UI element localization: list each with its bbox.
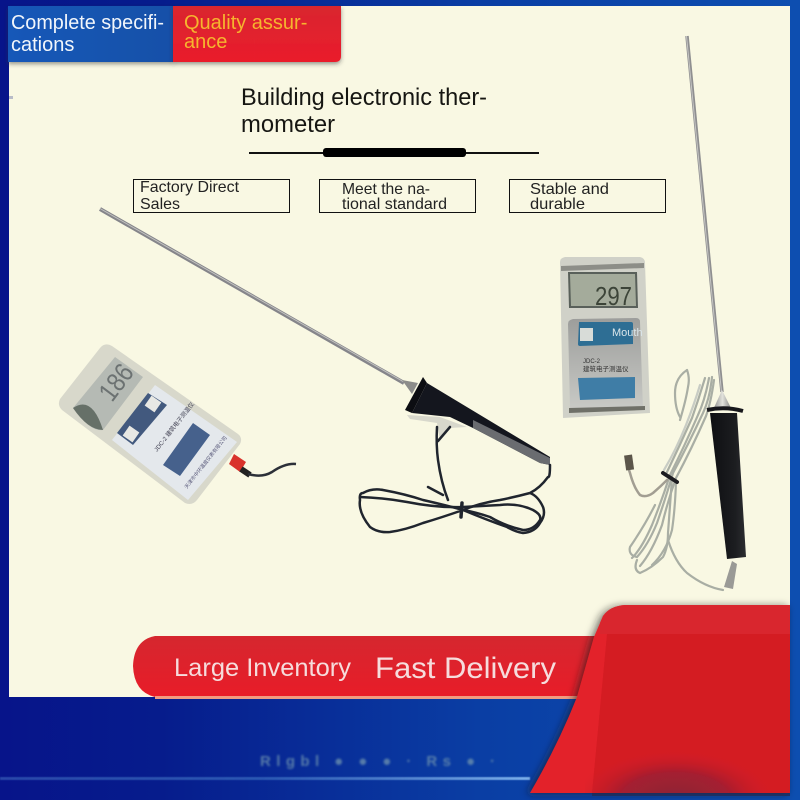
thermocouple tip: [624, 455, 634, 470]
meter spec panel: [163, 423, 210, 476]
badge: quality assurance: Quality assur-: [184, 12, 307, 34]
title: Building electronic ther-: [241, 84, 487, 111]
photo: vertical probe with silver cable: [624, 36, 746, 590]
silver cable bundle: [628, 370, 723, 590]
upright meter model: JDC-2: [583, 359, 601, 365]
meter screen: [73, 357, 143, 430]
meter connector and lead: [229, 454, 246, 472]
badge: complete specifications: Complete specifi-: [11, 12, 164, 34]
meter reading: 186: [93, 358, 140, 407]
badge: quality assurance: [173, 6, 341, 62]
title: [241, 84, 487, 138]
label box: national standard: Meet the na-: [342, 181, 430, 198]
photo: angled digital meter: 天津市中环温度仪表有限公司: [183, 435, 229, 490]
label box: national standard: [320, 180, 476, 213]
probe cable loops: [360, 427, 550, 533]
label box: factory direct sales: [134, 179, 290, 213]
label box: stable and durable: durable: [530, 196, 585, 213]
watermark text: Mouth: [612, 327, 643, 339]
title: mometer: [241, 111, 335, 138]
upright meter reading: 297: [595, 281, 632, 311]
title divider: [249, 148, 539, 157]
label box: stable and durable: Stable and: [530, 181, 609, 198]
photo: long probe with black handle: [100, 208, 550, 533]
red corner fold: [530, 605, 790, 795]
upright meter plate: [568, 318, 643, 410]
photo: upright digital meter: [560, 257, 650, 418]
fast delivery text: Fast Delivery: [375, 652, 556, 685]
label box: stable and durable: [510, 180, 666, 213]
meter body: [59, 344, 241, 504]
fold bottom shadow: [592, 793, 790, 796]
meter face plate: [112, 385, 237, 500]
label box: factory direct sales: Sales: [140, 196, 180, 213]
probe shaft: [100, 209, 404, 383]
upright meter spec strip: [578, 377, 635, 400]
vertical shaft: [687, 36, 722, 392]
small edge mark: [9, 96, 13, 99]
photo: angled digital meter: [59, 344, 296, 504]
upright meter blue strip: [578, 322, 633, 346]
badge: quality assurance: ance: [184, 31, 227, 53]
meter model label: JDC-2 建筑电子测温仪: [152, 400, 196, 453]
ribbon banner: [133, 636, 600, 699]
label box: national standard: tional standard: [342, 196, 447, 213]
photo: upright digital meter: 建筑电子测温仪: [583, 364, 629, 373]
vertical handle: [710, 413, 746, 559]
handle paper scrap: [407, 415, 467, 440]
label box: factory direct sales: Factory Direct: [140, 179, 240, 196]
upright meter screen: [568, 272, 638, 308]
large inventory text: Large Inventory: [174, 654, 352, 682]
badge: complete specifications: [8, 6, 174, 62]
badge: complete specifications: cations: [11, 34, 74, 56]
probe handle: [412, 383, 550, 465]
upright meter body: [560, 257, 650, 418]
bottom blue glow line: [0, 777, 530, 780]
meter button panel: [117, 393, 167, 445]
blurred footer text: Rlgbl ● ● ● · Rs ● ·: [260, 753, 495, 770]
